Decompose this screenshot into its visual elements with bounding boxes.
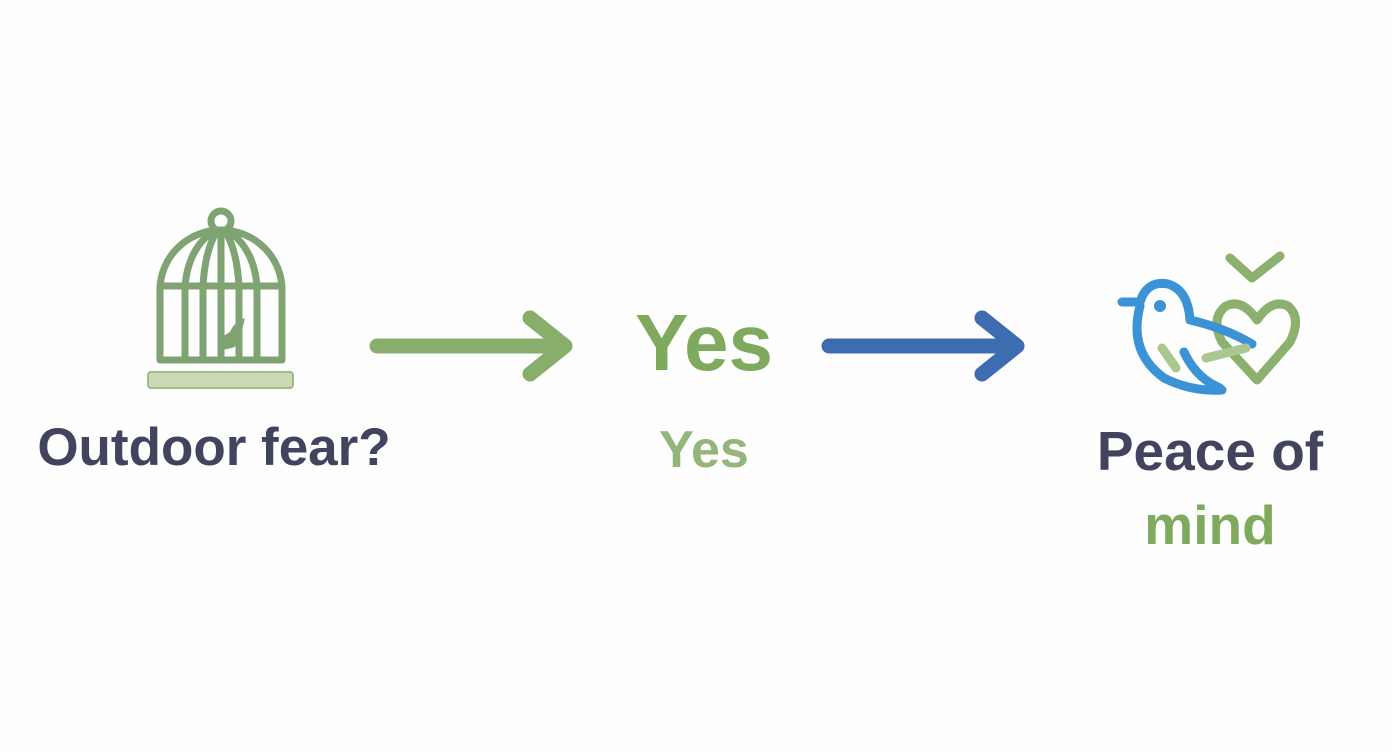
icon: bird with heart (1118, 252, 1300, 395)
arrow: green (370, 310, 572, 382)
icon: bird cage (147, 208, 294, 389)
text: outdoor fear: Outdoor fear? (37, 418, 391, 477)
text: peace of mind: Peace of (1097, 420, 1323, 482)
text: big yes: Yes (635, 298, 773, 387)
arrow: blue (822, 310, 1024, 382)
text: peace of mind (1097, 420, 1324, 556)
text: peace of mind: mind (1144, 494, 1276, 556)
text: small yes: Yes (659, 421, 749, 479)
